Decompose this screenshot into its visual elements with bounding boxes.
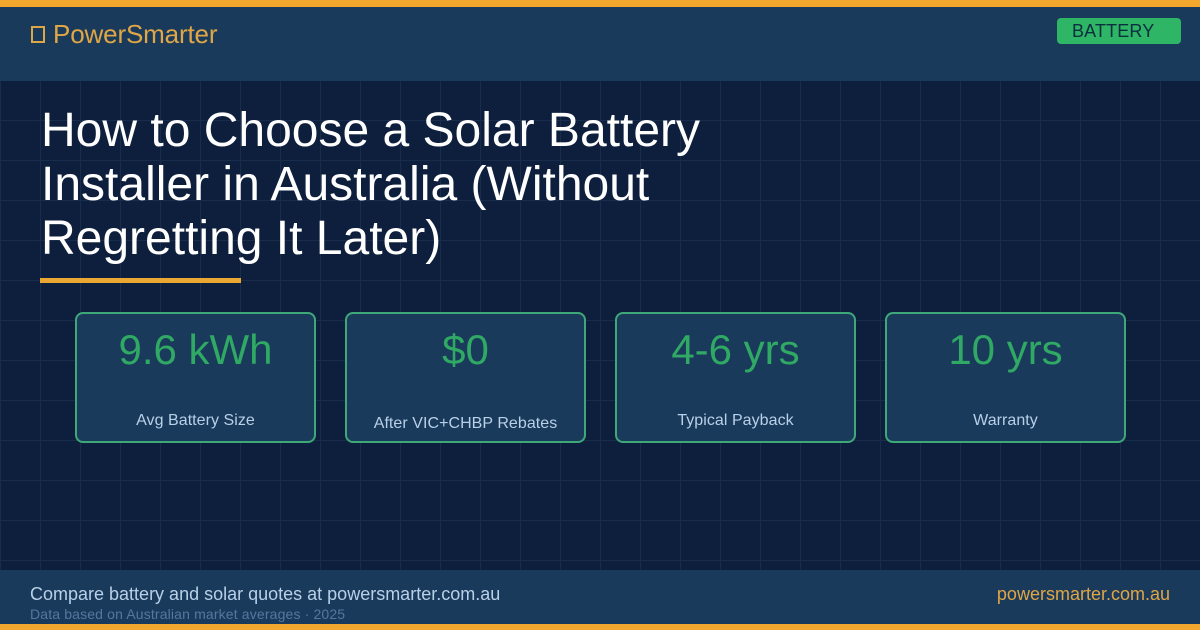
stat card: battery size (75, 312, 316, 443)
stat value: 9.6 kWh (118, 326, 273, 373)
top accent stripe (0, 0, 1200, 7)
stat card: payback (615, 312, 856, 443)
badge label: BATTERY (1072, 21, 1154, 41)
stat label: Typical Payback (677, 412, 794, 429)
footer bar (0, 570, 1200, 630)
footer website link: powersmarter.com.au (997, 584, 1170, 604)
title: Installer in Australia (Without (41, 158, 649, 211)
bottom accent stripe (0, 624, 1200, 630)
title underline (40, 278, 241, 283)
stat value: 10 yrs (948, 326, 1063, 373)
stat label: After VIC+CHBP Rebates (374, 415, 557, 432)
stat label: Avg Battery Size (136, 412, 255, 429)
title: How to Choose a Solar Battery (41, 104, 700, 157)
data source note: Data based on Australian market averages · 2025 (30, 606, 345, 622)
footer call to action: Compare battery and solar quotes at powersmarter.com.au (30, 584, 500, 604)
header bar (0, 0, 1200, 81)
title: Regretting It Later) (41, 212, 441, 265)
stat card: warranty (885, 312, 1126, 443)
stat value: 4-6 yrs (671, 326, 800, 373)
stat label: Warranty (973, 412, 1038, 429)
title (41, 104, 700, 265)
stat value: $0 (442, 326, 489, 373)
category badge (1057, 18, 1181, 44)
stat card: rebates (345, 312, 586, 443)
brand name: PowerSmarter (53, 19, 217, 49)
icon: missing glyph box (31, 26, 45, 43)
